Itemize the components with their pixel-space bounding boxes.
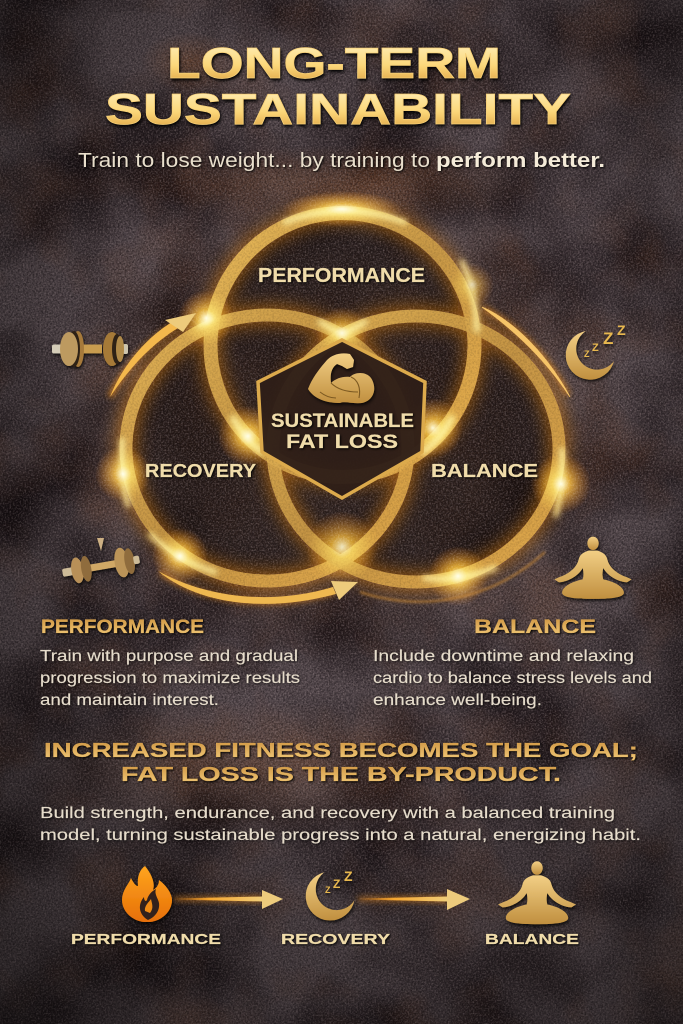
subtitle: perform better. xyxy=(436,150,605,172)
text block: summary: Build strength, endurance, and recovery with a balanced training xyxy=(40,805,615,822)
glow highlights xyxy=(95,191,591,606)
bright ring segments xyxy=(122,211,562,579)
icon: moon: Z xyxy=(325,885,331,895)
arrow: first xyxy=(174,890,283,909)
body text: Include downtime and relaxing xyxy=(373,648,634,665)
ring: performance xyxy=(210,213,474,477)
body text: progression to maximize results xyxy=(40,670,300,687)
body text xyxy=(40,648,300,709)
center label: SUSTAINABLE xyxy=(271,411,414,432)
arc: lower right xyxy=(360,552,545,602)
label: performance: PERFORMANCE xyxy=(71,931,221,948)
icon: moon top right xyxy=(566,322,626,380)
body text: enhance well-being. xyxy=(373,692,542,709)
body text: Train with purpose and gradual xyxy=(40,648,298,665)
arrow: second xyxy=(358,889,470,910)
label: balance: BALANCE xyxy=(485,931,579,948)
title: SUSTAINABILITY xyxy=(105,85,571,134)
icon: moon: Z xyxy=(344,868,353,884)
label: recovery: RECOVERY xyxy=(145,461,256,481)
icon: dumbbell top left xyxy=(52,331,128,367)
panel: balance xyxy=(373,617,652,709)
subtitle xyxy=(78,150,605,172)
icon: meditator xyxy=(498,861,576,924)
arc: upper right xyxy=(482,307,570,397)
icon: moon top right: Z xyxy=(617,322,626,338)
venn diagram xyxy=(95,190,591,606)
title xyxy=(105,39,571,134)
icon: dumbbell bottom left xyxy=(60,538,142,588)
icon: moon top right: Z xyxy=(592,342,599,354)
icon: meditator right xyxy=(554,537,632,599)
icon: moon top right: Z xyxy=(603,329,613,348)
icon: flame xyxy=(122,866,172,922)
flow: performance to recovery to balance xyxy=(71,861,579,948)
headline: goal statement: FAT LOSS IS THE BY-PRODUCT. xyxy=(121,764,561,786)
text block: summary: model, turning sustainable progress into a natural, energizing habit. xyxy=(40,827,641,844)
arrow: bottom curved xyxy=(158,571,358,604)
ring glow xyxy=(126,213,559,582)
label: recovery: RECOVERY xyxy=(281,931,390,948)
title: LONG-TERM xyxy=(167,39,501,88)
headline: goal statement xyxy=(44,740,638,786)
hexagon: sustainable fat loss xyxy=(258,340,425,498)
label: performance: PERFORMANCE xyxy=(258,265,425,287)
heading: BALANCE xyxy=(474,617,596,638)
icon: moon top right: Z xyxy=(584,349,590,359)
panel: performance xyxy=(40,617,300,709)
headline: goal statement: INCREASED FITNESS BECOMES THE GOAL; xyxy=(44,740,638,762)
center label xyxy=(271,411,414,453)
center label: FAT LOSS xyxy=(286,432,398,453)
body text: cardio to balance stress levels and xyxy=(373,670,652,687)
ring texture xyxy=(120,210,566,589)
dark circle interiors xyxy=(132,213,553,576)
icon: moon xyxy=(304,868,356,922)
label: balance: BALANCE xyxy=(431,461,538,481)
ring: recovery xyxy=(126,315,408,581)
arrow: upper left curved xyxy=(110,313,196,397)
heading: PERFORMANCE xyxy=(41,617,204,638)
body text: and maintain interest. xyxy=(40,692,219,709)
body text xyxy=(373,648,652,709)
subtitle: Train to lose weight... by training to xyxy=(78,150,430,172)
ring: balance xyxy=(273,316,559,582)
icon: moon: Z xyxy=(333,877,340,891)
text block: summary xyxy=(40,805,641,844)
icon: flexed muscle xyxy=(308,353,374,403)
